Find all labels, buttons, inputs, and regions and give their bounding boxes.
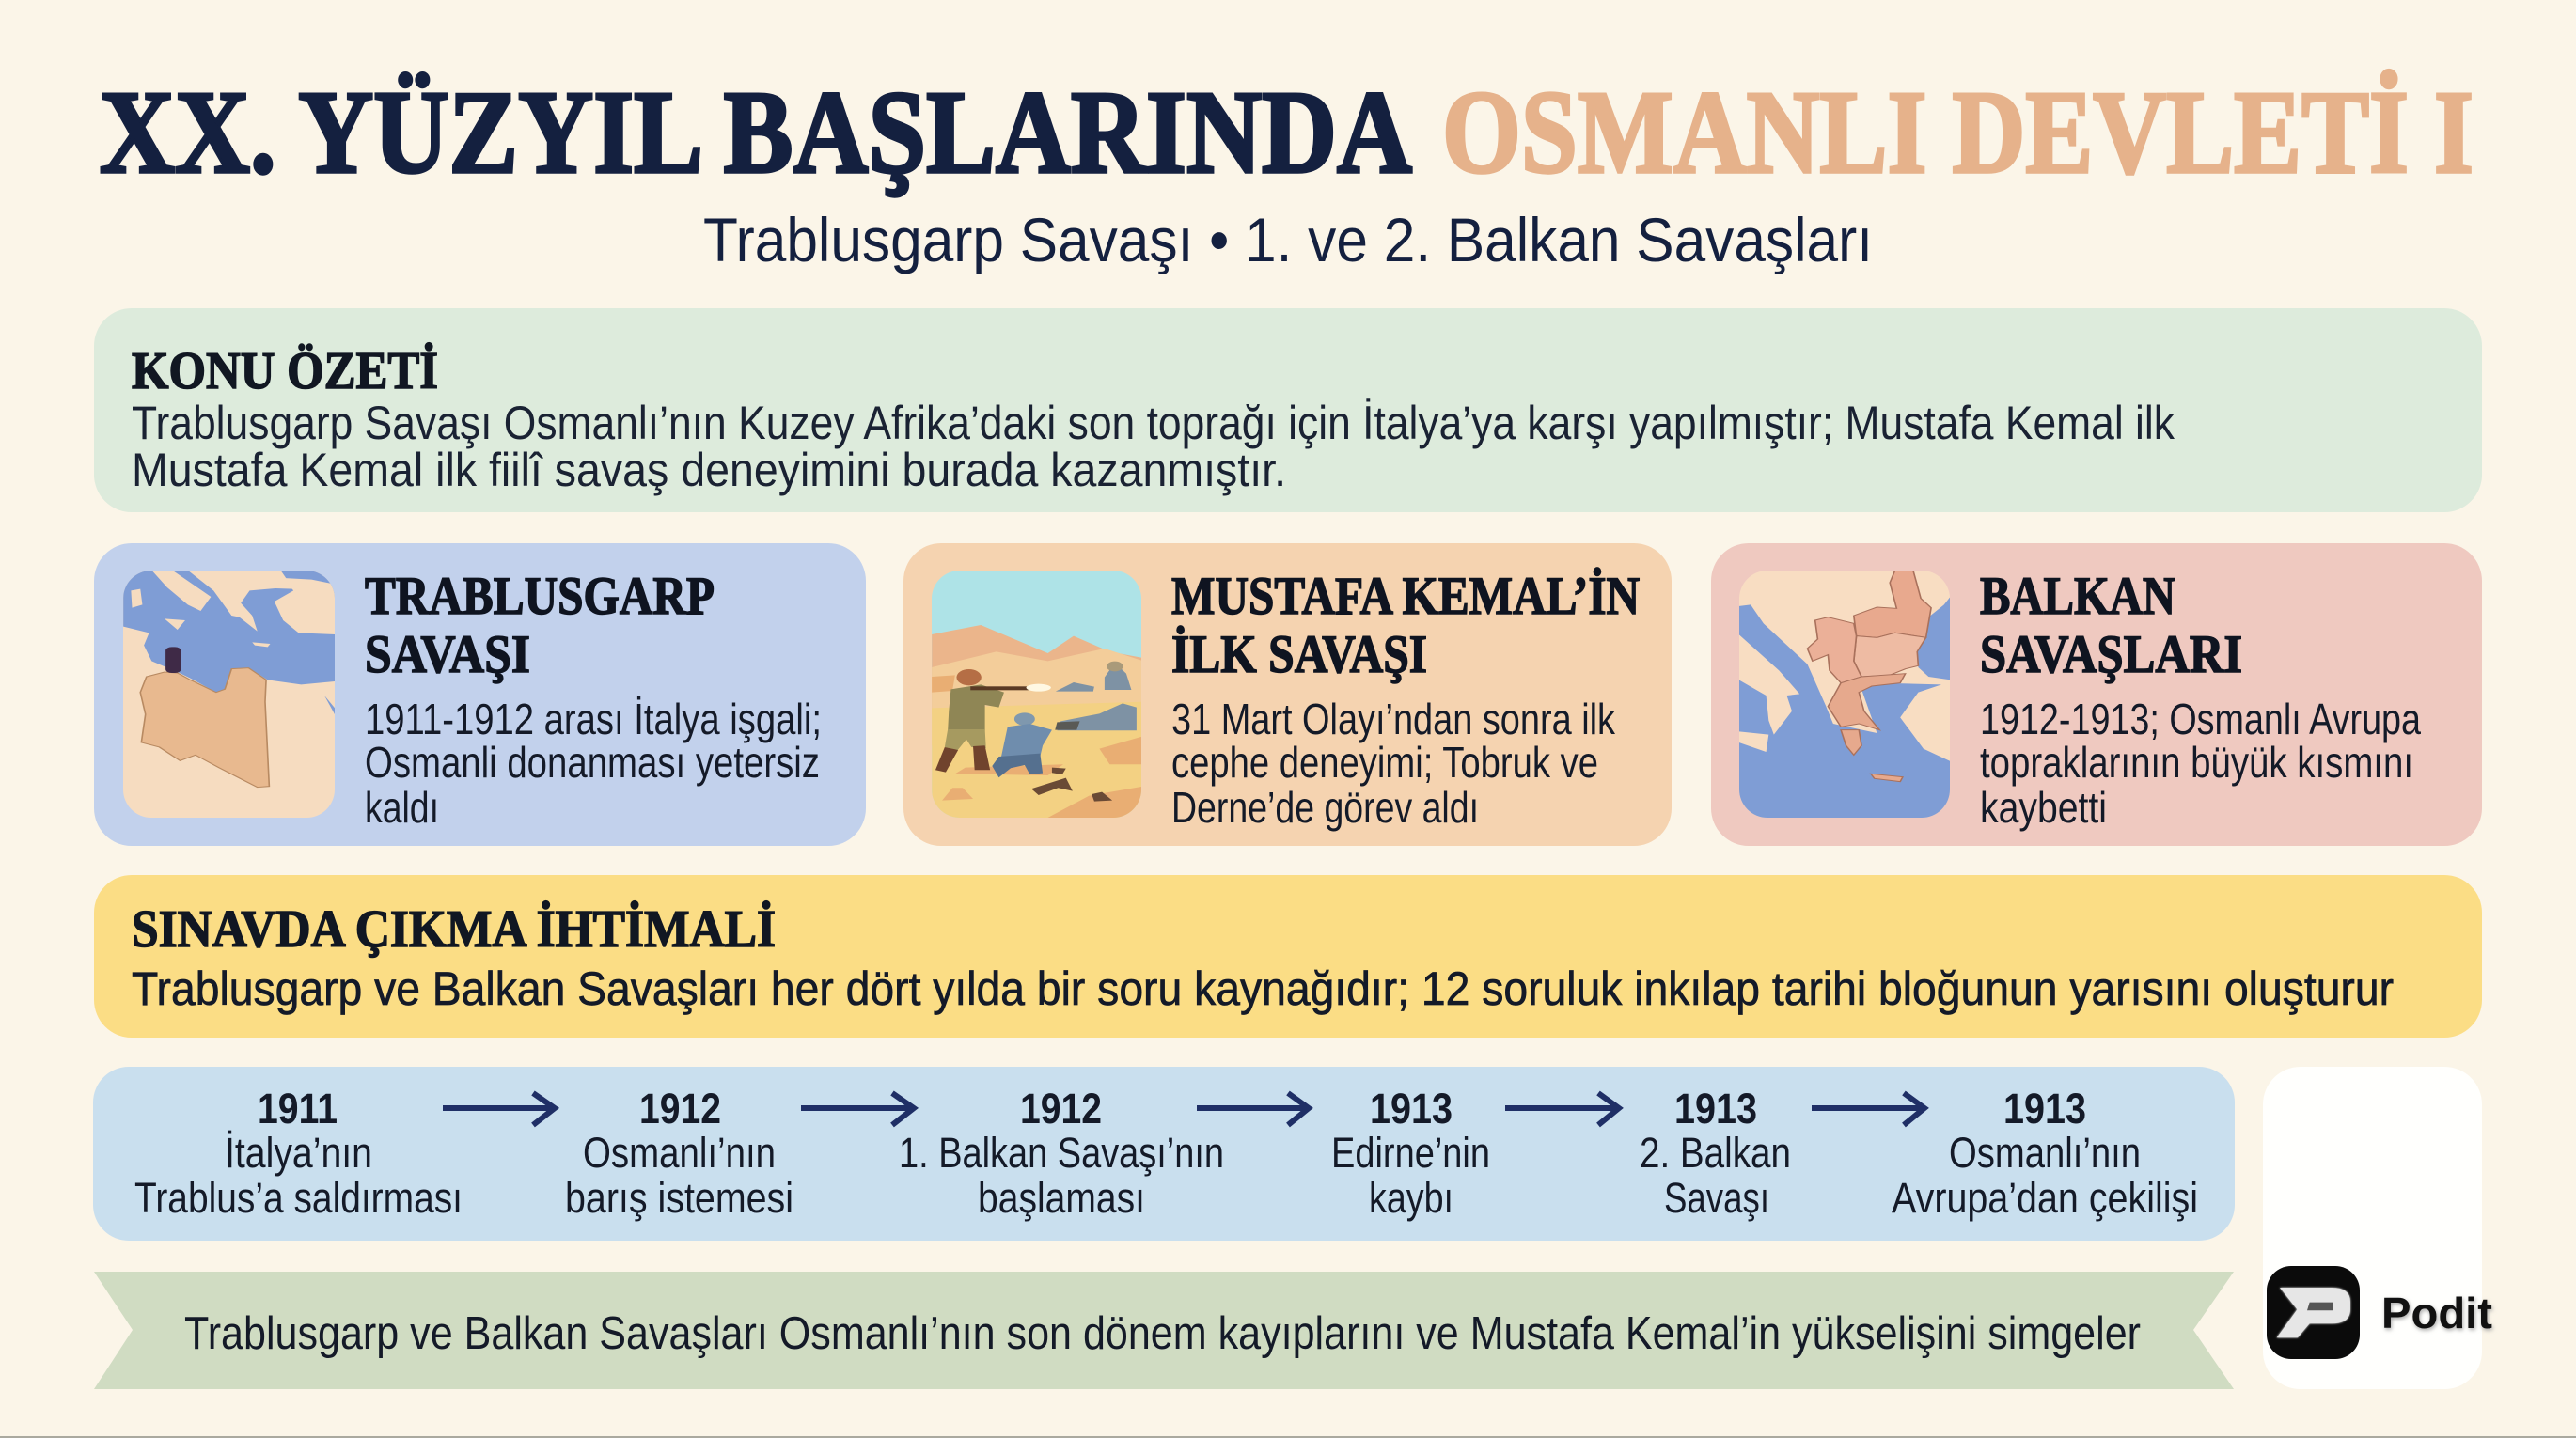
panel: konu özeti [94,308,2482,512]
logo text: Podit [2381,1289,2492,1337]
arrow [1505,1093,1619,1125]
heading: sınavda çıkma ihtimali: SINAVDA ÇIKMA İHTİMALİ [132,900,776,959]
timeline item: 1913 çekiliş: Avrupa’dan çekilişi [1892,1174,2198,1222]
heading: balkan savaşları [1980,567,2242,684]
timeline item: 1912 barış: 1912 [639,1085,721,1133]
icon: balkans map [1738,571,1950,818]
heading: trablusgarp savaşı: TRABLUSGARP [365,567,715,626]
timeline item: 1912 barış: Osmanlı’nın [583,1129,776,1177]
timeline item: 1912 barış [565,1085,793,1222]
fallen rifle and rocks [1031,768,1112,802]
timeline item: 1912 barış: barış istemesi [565,1174,793,1222]
logo panel [2263,1067,2493,1389]
heading: mustafa kemal: İLK SAVAŞI [1171,625,1427,684]
icon: desert battle scene [932,571,1143,818]
heading: balkan savaşları: BALKAN [1980,567,2175,626]
text block: balkan savaşları: 1912-1913; Osmanlı Avrupa [1980,695,2421,743]
icon: podit logo [2267,1266,2360,1359]
timeline item: 1912 balkan: 1912 [1020,1085,1102,1133]
banner text: Trablusgarp ve Balkan Savaşları Osmanlı’nın son dönem kayıplarını ve Mustafa Kemal’in yükselişini simgeler [184,1308,2141,1359]
heading: balkan savaşları: SAVAŞLARI [1980,625,2242,684]
timeline item: 1913 edirne: 1913 [1370,1085,1453,1133]
timeline item: 1913 ikinci balkan: 1913 [1674,1085,1757,1133]
heading: trablusgarp savaşı: SAVAŞI [365,625,530,684]
heading: konu özeti: KONU ÖZETİ [132,342,438,400]
title: XX. YÜZYIL BAŞLARINDA [100,68,1412,198]
banner ribbon [94,1272,2234,1389]
text block: trablusgarp savaşı: 1911-1912 arası İtalya işgali; [365,695,822,743]
timeline item: 1911: İtalya’nın [225,1129,372,1177]
timeline item: 1911: 1911 [258,1085,338,1133]
timeline item: 1913 çekiliş [1892,1085,2198,1222]
timeline item: 1912 balkan: 1. Balkan Savaşı’nın [899,1129,1224,1177]
subtitle: Trablusgarp Savaşı • 1. ve 2. Balkan Savaşları [703,205,1873,274]
heading: trablusgarp savaşı [365,567,715,684]
soldier kneeling [1014,712,1035,726]
text block: mustafa kemal: 31 Mart Olayı’ndan sonra ilk [1171,695,1616,743]
text block: mustafa kemal: cephe deneyimi; Tobruk ve [1171,738,1598,787]
icon: libya map [123,571,335,818]
text block: konu özeti [132,397,2175,496]
fallen soldiers [1057,703,1137,730]
soldier standing [956,669,982,685]
timeline item: 1913 çekiliş: Osmanlı’nın [1949,1129,2141,1177]
timeline item: 1911 [134,1085,463,1222]
timeline item: 1913 çekiliş: 1913 [2003,1085,2086,1133]
arrow [1812,1093,1924,1125]
text block: konu özeti: Trablusgarp Savaşı Osmanlı’nın Kuzey Afrika’daki son toprağı için İtalya’ya karşı yapılmıştır; Mustafa Kemal ilk [132,397,2175,449]
text block: trablusgarp savaşı: Osmanli donanması yetersiz [365,738,820,787]
timeline item: 1913 edirne [1331,1085,1490,1222]
panel: mustafa kemal [903,543,1672,846]
text block: trablusgarp savaşı [365,695,822,832]
heading: mustafa kemal [1171,567,1640,684]
timeline item: 1913 edirne: kaybı [1369,1174,1453,1222]
text block: trablusgarp savaşı: kaldı [365,783,439,832]
timeline item: 1913 ikinci balkan: 2. Balkan [1640,1129,1791,1177]
text block: balkan savaşları: kaybetti [1980,783,2107,832]
timeline panel [93,1067,2235,1241]
text block: mustafa kemal [1171,695,1616,832]
arrow [1197,1093,1309,1125]
arrow [443,1093,555,1125]
text block: mustafa kemal: Derne’de görev aldı [1171,783,1479,832]
panel: sınavda çıkma ihtimali [94,875,2482,1038]
timeline item: 1911: Trablus’a saldırması [134,1174,463,1222]
text block: balkan savaşları [1980,695,2421,832]
timeline item: 1912 balkan: başlaması [978,1174,1145,1222]
timeline item: 1912 balkan [899,1085,1224,1222]
arrow [801,1093,914,1125]
timeline item: 1913 edirne: Edirne’nin [1331,1129,1490,1177]
timeline item: 1913 ikinci balkan [1640,1085,1791,1222]
timeline item: 1913 ikinci balkan: Savaşı [1664,1174,1769,1222]
title [100,68,2474,198]
text block: balkan savaşları: topraklarının büyük kısmını [1980,738,2413,787]
text block: sınavda çıkma ihtimali: Trablusgarp ve Balkan Savaşları her dört yılda bir soru kaynağıdır; 12 soruluk inkılap tarihi bloğunun yarısını oluşturur [132,962,2394,1015]
panel: balkan savaşları [1711,543,2482,846]
text block: konu özeti: Mustafa Kemal ilk fiilî savaş deneyimini burada kazanmıştır. [132,444,1286,496]
logo text: Podit [2382,1290,2493,1339]
panel: trablusgarp savaşı [94,543,866,846]
heading: mustafa kemal: MUSTAFA KEMAL’İN [1171,567,1640,626]
